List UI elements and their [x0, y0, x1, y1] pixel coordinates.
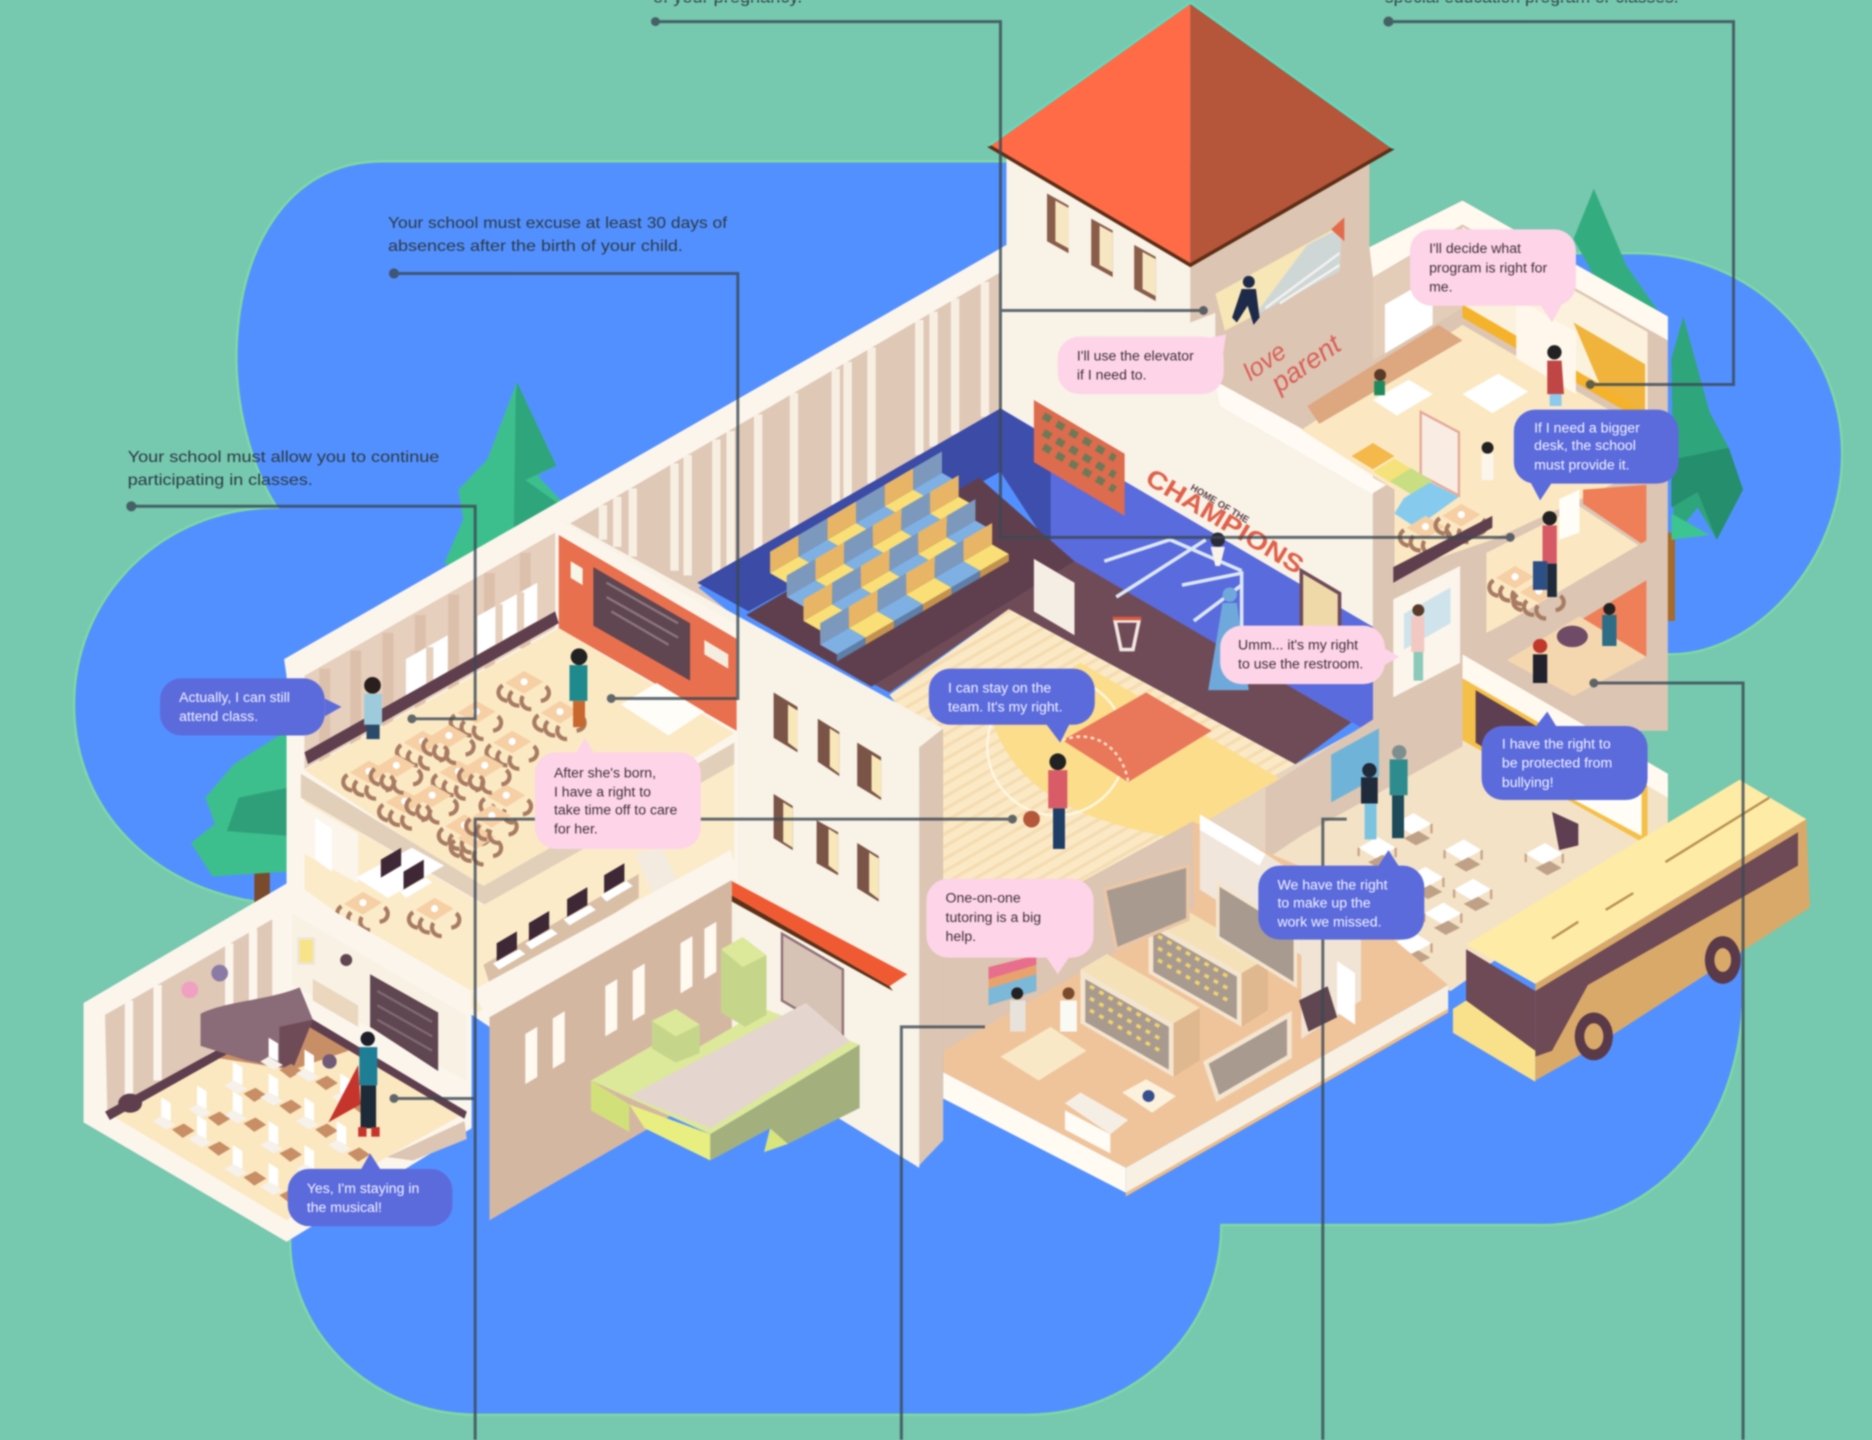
floor: [113, 1015, 466, 1220]
bubble: bullying: [1482, 712, 1648, 800]
coloured floor tiles: [1351, 443, 1459, 528]
bubble: make up work: to make up the: [1277, 894, 1371, 910]
library door: [1299, 884, 1361, 1039]
room shell: [84, 884, 472, 1242]
classroom floor: [304, 628, 734, 890]
hallway wall behind court: [1194, 721, 1394, 884]
brown rug behind piano: [209, 1024, 349, 1070]
bubble: still attend class: attend class.: [179, 708, 258, 724]
tables in right wing: [1307, 325, 1528, 496]
bubble: time off: [535, 738, 701, 849]
bubble: tutoring: tutoring is a big: [946, 909, 1041, 925]
stair window: [1215, 217, 1344, 331]
bubble: bullying: be protected from: [1502, 755, 1612, 771]
bleachers: [770, 451, 1009, 662]
bubble: decide program: program is right for: [1429, 259, 1548, 275]
person on elevator: [1232, 276, 1260, 325]
facade windows: [525, 922, 716, 1084]
bubble: restroom: [1220, 626, 1399, 684]
wall art: [181, 938, 358, 1027]
computer counter: [484, 848, 678, 991]
tower: [989, 2, 1394, 494]
champions banner: CHAMPIONS: [1141, 464, 1309, 580]
lab shell: [304, 764, 734, 1012]
tree lower left: [191, 731, 287, 903]
tree upper left: [444, 382, 575, 571]
bubble: time off: After she's born,: [554, 764, 656, 780]
lower right rooms: [1393, 485, 1648, 697]
caption: classes: participating in classes.: [128, 472, 313, 489]
music room: [84, 884, 472, 1242]
sofa and side table: [1065, 1079, 1176, 1153]
bubble: musical: Yes, I'm staying in: [307, 1180, 419, 1196]
student teen: [569, 648, 587, 727]
lower right classroom: [1266, 654, 1668, 991]
bus front: [1466, 949, 1535, 1057]
trees right: [1574, 189, 1743, 621]
bubble: elevator: if I need to.: [1077, 367, 1147, 383]
stage: [591, 937, 860, 1161]
student with ball: [1023, 753, 1067, 849]
library: [943, 814, 1448, 1196]
bubble: bullying: bullying!: [1502, 774, 1554, 790]
tutoring table: [1000, 987, 1086, 1081]
court: [987, 663, 1280, 838]
connector: classes: [128, 503, 475, 722]
classroom desks: [343, 671, 585, 864]
connector: make-up work: [1323, 819, 1347, 1440]
bubble: decide program: I'll decide what: [1429, 240, 1521, 256]
tower windows: [1047, 194, 1156, 301]
bubble: bigger desk: desk, the school: [1534, 437, 1636, 453]
wing cream wall: [561, 518, 943, 1168]
connector: bullying: [1591, 680, 1743, 1440]
bubble: time off: I have a right to: [554, 783, 651, 799]
bubble: bigger desk: If I need a bigger: [1534, 419, 1640, 435]
bubble: make up work: work we missed.: [1276, 914, 1381, 930]
bottom strip of wing: [561, 518, 943, 1168]
connector: pregnancy: [652, 19, 1513, 540]
desks above rail: [1400, 504, 1486, 554]
bubble: still attend class: Actually, I can still: [179, 689, 290, 705]
bus: [1453, 780, 1810, 1082]
bus wheels: [1575, 936, 1741, 1060]
rails: [105, 1014, 467, 1120]
bubble: bigger desk: must provide it.: [1534, 456, 1630, 472]
center table: [337, 848, 459, 936]
upper left classroom: [287, 521, 738, 1027]
parent logo on wall: [1238, 308, 1348, 408]
back wall with stripes: [284, 248, 1000, 676]
person in gown: [1208, 533, 1249, 690]
bubble: tutoring: One-on-one: [946, 890, 1021, 906]
floor: [889, 609, 1295, 958]
bubble: restroom: to use the restroom.: [1238, 656, 1363, 672]
blackboard: [370, 974, 438, 1071]
gym back walls: [697, 155, 1373, 734]
caped person: [328, 1032, 380, 1137]
rainbow flag: [989, 955, 1036, 1005]
classroom shell: [287, 521, 738, 1027]
stage edge: [387, 1121, 467, 1161]
bus bumper: [1453, 1001, 1535, 1082]
caption: classes: Your school must allow you to continue: [128, 449, 439, 466]
bubble: elevator: I'll use the elevator: [1077, 348, 1194, 364]
whiteboard and hoop: [1034, 540, 1340, 651]
tan facade: [489, 880, 732, 1220]
tower side wall: [1190, 162, 1381, 437]
bubble: elevator: [1058, 334, 1226, 394]
student by window: [364, 677, 382, 739]
champions banner: HOME OF THE: [1188, 482, 1251, 526]
roof: [989, 2, 1393, 265]
right wing: [1266, 201, 1668, 991]
bubble: stay on the team: team. It's my right.: [948, 699, 1063, 715]
bubble: tutoring: help.: [946, 928, 976, 944]
awning: [732, 881, 907, 991]
parent logo on wall: love: [1238, 337, 1292, 386]
rail: [304, 611, 559, 764]
bus roof: [1466, 780, 1806, 984]
bubble: musical: [288, 1153, 452, 1226]
bubble: bullying: I have the right to: [1502, 736, 1611, 752]
bubble: stay on the team: I can stay on the: [948, 680, 1051, 696]
bubble: stay on the team: [929, 669, 1095, 743]
door: [782, 934, 843, 1036]
connector: tutoring: [901, 1027, 985, 1440]
wing windows: [774, 693, 881, 901]
bus windows: [1535, 832, 1798, 1057]
bubble: still attend class: [160, 678, 341, 736]
bubble: decide program: me.: [1429, 278, 1453, 294]
bubble: bigger desk: [1514, 410, 1679, 500]
students in right wing: [1374, 345, 1617, 683]
bubble: time off: take time off to care: [554, 801, 678, 817]
bubble: time off: for her.: [554, 820, 598, 836]
connector: left trunk: [391, 816, 1015, 1440]
bubble: make up work: We have the right: [1277, 877, 1388, 893]
computer lab: [304, 764, 738, 1021]
caption: absences: absences after the birth of your child.: [388, 238, 683, 255]
bubble: decide program: [1410, 229, 1576, 322]
bubble: musical: the musical!: [307, 1199, 382, 1215]
right wing floors and walls: [1301, 201, 1668, 764]
gym: [697, 155, 1394, 958]
entrance facade: [489, 880, 907, 1220]
wing tan side: [917, 728, 943, 1168]
connector: program: [1385, 18, 1734, 388]
parent logo on wall: parent: [1264, 328, 1348, 399]
orange wall with chalkboard: [559, 535, 737, 731]
connector: absences: [390, 270, 738, 701]
bubble: make up work: [1258, 850, 1424, 940]
white ledge: [1215, 381, 1394, 494]
bus body: [1535, 819, 1810, 1081]
two students in hallway: [1361, 745, 1408, 839]
slab: [301, 743, 734, 907]
mauve floor strip: [872, 561, 1351, 764]
roof slab: [472, 850, 738, 1021]
scoreboard: [1034, 400, 1125, 516]
chairs: [153, 1038, 374, 1204]
bubble: restroom: Umm... it's my right: [1238, 637, 1358, 653]
teacher desk: [621, 683, 704, 736]
caption: absences: Your school must excuse at least 30 days of: [388, 215, 728, 232]
piano: [118, 987, 337, 1113]
library platform: [943, 814, 1448, 1196]
bubble: tutoring: [926, 879, 1094, 974]
bookcases: [1080, 866, 1295, 1098]
